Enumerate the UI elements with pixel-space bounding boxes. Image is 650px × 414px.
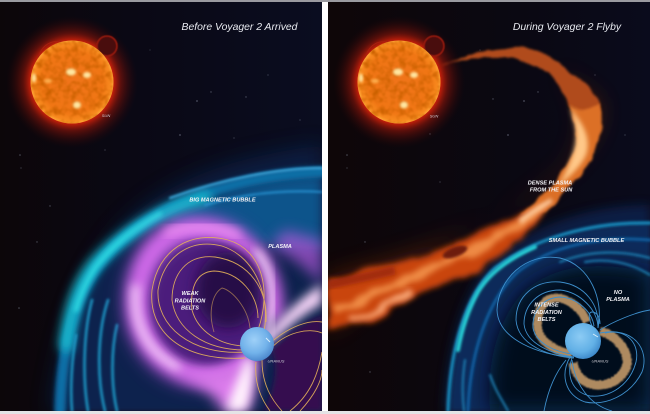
cyan bubble streaks bbox=[448, 223, 650, 411]
stream, upper arc bbox=[444, 48, 601, 116]
magnetic field lines bbox=[497, 257, 650, 411]
label: big magnetic bubble: BIG MAGNETIC BUBBLE bbox=[189, 198, 256, 204]
label: uranus: URANUS bbox=[592, 358, 609, 364]
label: intense radiation belts: BELTS bbox=[538, 317, 556, 323]
label: intense radiation belts: INTENSE bbox=[534, 302, 559, 308]
title: during: During Voyager 2 Flyby bbox=[513, 22, 622, 33]
icon: Sun bbox=[10, 20, 134, 144]
right lobes of plasma bbox=[270, 230, 322, 286]
label: sun: SUN bbox=[102, 113, 110, 118]
label: weak radiation belts: BELTS bbox=[181, 306, 199, 312]
icon: Uranus bbox=[240, 327, 274, 361]
label: weak radiation belts: RADIATION bbox=[175, 298, 206, 304]
solar plasma stream bbox=[328, 48, 601, 335]
label: plasma: PLASMA bbox=[268, 244, 292, 250]
top edge strip bbox=[0, 0, 650, 2]
label: intense radiation belts: RADIATION bbox=[531, 310, 563, 316]
label: sun: SUN bbox=[430, 114, 438, 118]
stream, descending section bbox=[520, 104, 601, 215]
magnetic bubble, blue field region bbox=[50, 145, 322, 411]
star field bbox=[346, 50, 626, 373]
label: no plasma: PLASMA bbox=[606, 297, 630, 303]
label: small magnetic bubble: SMALL MAGNETIC BUBBLE bbox=[549, 238, 624, 244]
radiation belts bbox=[538, 298, 627, 385]
panel: before Voyager 2 arrived bbox=[0, 2, 322, 411]
icon: Uranus bbox=[565, 323, 601, 359]
cyan bubble streaks bbox=[60, 168, 322, 411]
magnetic bubble, blue field region bbox=[444, 205, 650, 411]
title: before: Before Voyager 2 Arrived bbox=[182, 22, 299, 33]
panel: during Voyager 2 flyby bbox=[328, 2, 650, 411]
dark violet interior bbox=[152, 242, 264, 364]
radiation belt field lines bbox=[152, 237, 322, 411]
stream, soft halo bbox=[328, 70, 601, 335]
label: dense plasma from the sun: DENSE PLASMA bbox=[528, 180, 572, 186]
label: uranus: URANUS bbox=[268, 358, 285, 364]
lower plasma fan bbox=[170, 356, 255, 411]
stream, broad lower section bbox=[328, 200, 555, 327]
label: dense plasma from the sun: FROM THE SUN bbox=[530, 188, 573, 194]
bottom edge strip bbox=[0, 411, 650, 414]
plasma torus, violet glow bbox=[124, 218, 322, 411]
label: weak radiation belts: WEAK bbox=[181, 291, 199, 297]
star field bbox=[18, 50, 301, 309]
icon: Sun bbox=[337, 20, 461, 144]
label: no plasma: NO bbox=[614, 290, 622, 296]
